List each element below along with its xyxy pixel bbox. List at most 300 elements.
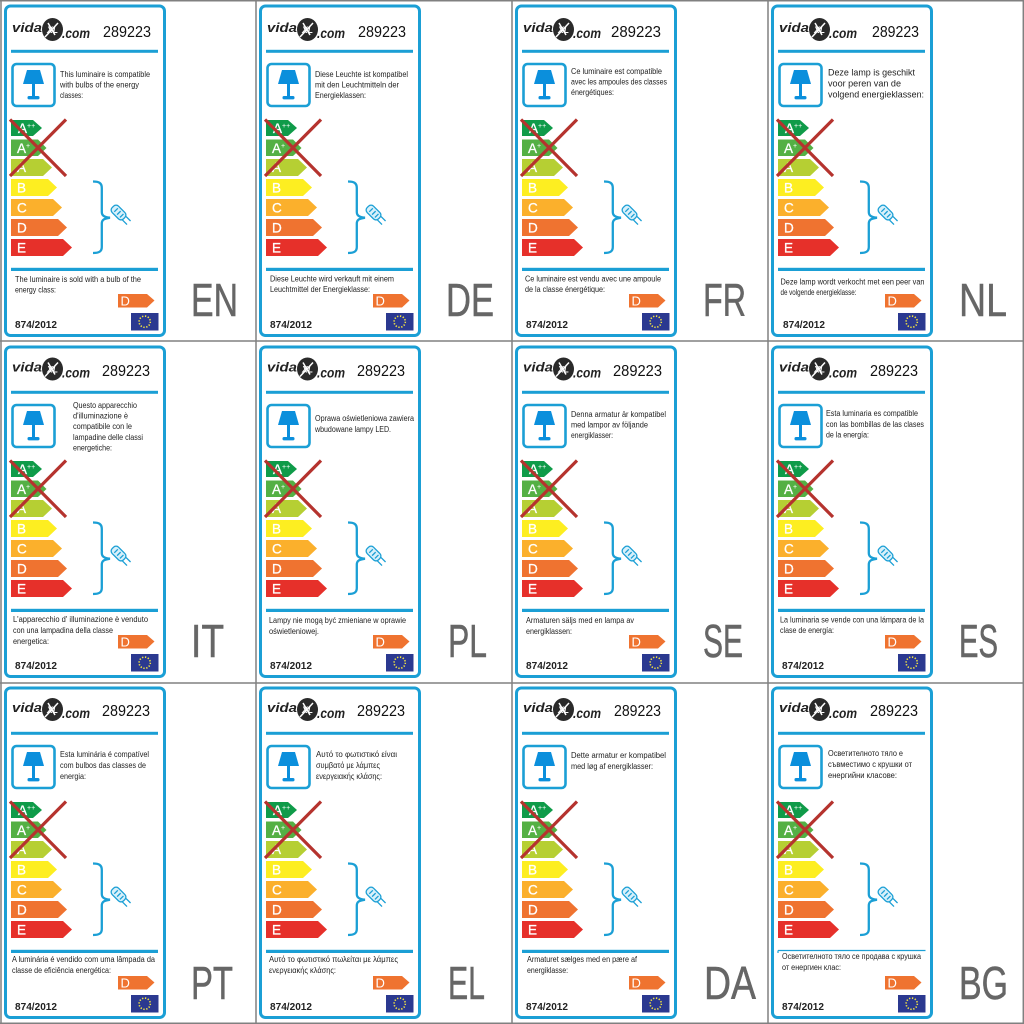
sold-with text: oświetleniowej.: [269, 627, 319, 636]
energy class bars: A: [273, 462, 282, 477]
energy class bars: A: [529, 462, 538, 477]
brace: [604, 182, 621, 253]
sold-with text: con una lampadina della classe: [13, 626, 113, 635]
lower rule: [266, 609, 413, 612]
energy class bars: C: [17, 200, 27, 216]
lower rule: [778, 609, 925, 612]
compatibility text: compatibile con le: [73, 422, 132, 431]
lower rule: [266, 950, 413, 953]
language code: EL: [448, 957, 485, 1009]
red cross: [521, 460, 577, 517]
energy class bars: E: [528, 240, 537, 256]
energy class bars: D: [528, 562, 538, 576]
sold-with text: energiklasse:: [527, 966, 568, 975]
icon: bulb: [877, 545, 899, 567]
compatibility text: com bulbos das classes de: [60, 761, 146, 770]
logo: vida: [267, 20, 297, 35]
energy class bars: B: [528, 522, 537, 536]
energy class bars: C: [272, 882, 282, 898]
compatibility text: [571, 67, 667, 97]
energy class bars: D: [528, 902, 538, 918]
energy class bars: +: [537, 484, 541, 491]
frame: [772, 6, 932, 336]
energy class bars: B: [17, 522, 26, 536]
compatibility text: de la energía:: [826, 430, 869, 440]
sold-with text: [780, 616, 924, 635]
class D arrow: [118, 294, 154, 308]
product number: 289223: [611, 24, 661, 41]
top rule: [266, 732, 413, 735]
sold-with text: [527, 955, 638, 975]
energy class bars: [11, 461, 72, 597]
energy class bars: +: [537, 825, 541, 832]
logo: .com: [317, 705, 345, 721]
compatibility text: d'illuminazione è: [73, 412, 129, 420]
energy class bars: E: [528, 582, 537, 596]
EU flag: [386, 654, 414, 672]
energy class bars: A: [17, 501, 26, 516]
sold-with text: energetica:: [13, 637, 49, 646]
icon: bulb: [365, 886, 387, 908]
energy class bars: A: [18, 462, 27, 477]
energy class bars: ++: [794, 464, 802, 471]
sold-with text: clase de energía:: [780, 626, 834, 635]
energy class bars: E: [528, 922, 537, 938]
EU flag: [386, 313, 414, 330]
class D arrow: D: [120, 294, 130, 308]
regulation number: 874/2012: [526, 320, 568, 331]
logo: XL: [46, 705, 58, 715]
brace: [604, 864, 621, 935]
logo: XL: [301, 25, 313, 35]
energy class bars: E: [17, 922, 26, 938]
energy class bars: D: [272, 902, 282, 918]
logo: XL: [301, 364, 313, 374]
energy class bars: A: [529, 121, 538, 136]
icon: lamp: [12, 746, 54, 788]
panel: EL label: [260, 688, 485, 1018]
compatibility text: This luminaire is compatible: [60, 70, 151, 79]
energy class bars: D: [17, 562, 27, 576]
energy class bars: A: [528, 823, 537, 838]
top rule: [778, 50, 925, 53]
frame: [772, 347, 932, 676]
EU flag: [386, 995, 414, 1012]
compatibility text: Dette armatur er kompatibel: [571, 751, 666, 760]
logo: [12, 698, 90, 721]
icon: lamp: [524, 64, 566, 106]
energy class bars: E: [272, 582, 281, 596]
logo: .com: [317, 364, 345, 380]
compatibility text: Questo apparecchio: [73, 401, 137, 410]
brace: [93, 864, 110, 935]
top rule: [11, 50, 158, 53]
lower rule: [522, 268, 669, 271]
energy class bars: C: [528, 882, 538, 898]
top rule: [522, 732, 669, 735]
red cross: [10, 120, 66, 176]
class D arrow: D: [888, 976, 897, 990]
energy class bars: A: [785, 121, 794, 136]
red cross: [521, 802, 577, 858]
energy class bars: +: [793, 484, 797, 491]
energy class bars: D: [272, 562, 282, 576]
compatibility text: with bulbs of the energy: [59, 80, 139, 90]
frame: [6, 688, 164, 1018]
regulation number: 874/2012: [782, 661, 824, 672]
energy class bars: D: [17, 902, 27, 918]
language code: BG: [959, 957, 1008, 1009]
sold-with text: Ce luminaire est vendu avec une ampoule: [525, 274, 662, 284]
energy class bars: +: [793, 143, 797, 150]
red cross: [10, 802, 66, 858]
language code: DE: [446, 274, 494, 326]
logo: [267, 18, 345, 41]
product number: 289223: [102, 363, 150, 380]
brace: [93, 182, 110, 253]
compatibility text: [828, 749, 912, 780]
language code: PL: [448, 615, 487, 667]
sold-with text: Deze lamp wordt verkocht met een peer van: [780, 278, 924, 286]
frame: [260, 6, 420, 336]
energy class bars: A: [784, 482, 793, 497]
energy class bars: ++: [27, 123, 35, 130]
energy class bars: B: [528, 180, 537, 196]
class D arrow: [885, 976, 922, 990]
top rule: [522, 391, 669, 394]
energy class bars: A: [17, 141, 26, 156]
energy class bars: E: [17, 240, 26, 256]
energy class bars: C: [17, 882, 27, 898]
energy class bars: A: [272, 501, 281, 516]
compatibility text: energiklasser:: [571, 431, 613, 440]
red cross: [777, 460, 833, 517]
logo: .com: [62, 25, 90, 41]
energy class bars: +: [281, 825, 285, 832]
logo: XL: [813, 25, 825, 35]
sold-with text: A luminária é vendido com uma lâmpada da: [12, 955, 155, 964]
logo: vida: [12, 20, 42, 35]
energy class bars: A: [18, 803, 27, 818]
energy class bars: ++: [282, 805, 290, 812]
icon: bulb: [110, 545, 132, 567]
red cross: [777, 120, 833, 176]
sold-with text: [270, 274, 394, 294]
sold-with text: de volgende energieklasse:: [780, 288, 856, 297]
logo: vida: [267, 360, 297, 374]
class D arrow: D: [120, 634, 130, 650]
logo: [267, 358, 345, 380]
icon: bulb: [365, 545, 387, 567]
panel: DA label: [516, 688, 756, 1018]
logo: [779, 698, 857, 721]
energy class bars: A: [528, 141, 537, 156]
icon: bulb: [365, 204, 387, 226]
logo: XL: [813, 364, 825, 374]
logo: vida: [779, 700, 809, 715]
sold-with text: Armaturen säljs med en lampa av: [526, 616, 634, 625]
energy class bars: B: [272, 522, 281, 536]
logo: .com: [573, 364, 601, 380]
sold-with text: [15, 275, 142, 294]
logo: vida: [523, 20, 553, 35]
compatibility text: energia:: [60, 772, 86, 781]
energy class bars: C: [784, 882, 794, 898]
icon: bulb: [621, 886, 643, 908]
frame: [516, 347, 676, 676]
EU flag: [131, 313, 158, 330]
energy class bars: A: [528, 842, 537, 857]
compatibility text: énergétiques:: [571, 88, 614, 97]
compatibility text: Ce luminaire est compatible: [571, 67, 663, 76]
logo: .com: [829, 705, 857, 721]
language code: ES: [959, 615, 998, 667]
EU flag: [131, 654, 158, 672]
brace: [860, 864, 877, 935]
energy class bars: [11, 120, 72, 256]
logo: .com: [829, 25, 857, 41]
panel: PT label: [6, 688, 233, 1018]
energy class bars: B: [784, 862, 793, 878]
energy class bars: ++: [538, 805, 546, 812]
compatibility text: Esta luminária é compatível: [60, 750, 149, 759]
compatibility text: voor peren van de: [828, 78, 901, 88]
energy class bars: C: [272, 200, 282, 216]
energy class bars: A: [272, 823, 281, 838]
language code: FR: [703, 274, 746, 326]
energy class bars: A: [784, 842, 793, 857]
class D arrow: [629, 634, 666, 650]
red cross: [777, 802, 833, 858]
energy class bars: E: [17, 582, 26, 596]
logo: vida: [12, 360, 42, 374]
brace: [348, 182, 365, 253]
compatibility text: avec les ampoules des classes: [571, 78, 667, 86]
logo: XL: [557, 705, 569, 715]
sold-with text: ενεργειακής κλάσης:: [269, 966, 336, 975]
compatibility text: [315, 70, 408, 100]
top rule: [522, 50, 669, 53]
icon: lamp: [268, 64, 310, 106]
class D arrow: D: [632, 976, 641, 990]
class D arrow: [629, 294, 666, 308]
class D arrow: [885, 634, 922, 650]
language code: NL: [959, 274, 1007, 326]
sold-with text: energy class:: [15, 286, 56, 294]
class D arrow: D: [888, 294, 897, 308]
logo: vida: [523, 700, 553, 715]
icon: lamp: [268, 746, 310, 788]
energy class bars: A: [273, 121, 282, 136]
compatibility text: [60, 750, 149, 781]
frame: [516, 688, 676, 1018]
energy class bars: A: [529, 803, 538, 818]
panel: ES label: [772, 347, 998, 676]
logo: XL: [46, 364, 58, 374]
energy class bars: A: [17, 160, 26, 175]
icon: bulb: [621, 204, 643, 226]
compatibility text: lampadine delle classi: [73, 433, 143, 442]
top rule: [266, 50, 413, 53]
energy class bars: [522, 461, 583, 597]
logo: [12, 358, 90, 380]
logo: .com: [829, 364, 857, 380]
energy class bars: [778, 802, 839, 938]
energy class bars: A: [784, 160, 793, 175]
energy class bars: E: [784, 240, 793, 256]
class D arrow: D: [376, 294, 385, 308]
panel: SE label: [516, 347, 743, 676]
sold-with text: [782, 952, 921, 972]
compatibility text: съвместимо с крушки от: [828, 760, 912, 769]
product number: 289223: [613, 363, 662, 380]
top rule: [11, 732, 158, 735]
logo: .com: [62, 364, 90, 380]
frame: [6, 347, 164, 676]
energy class bars: D: [528, 220, 538, 236]
energy class bars: B: [272, 862, 281, 878]
compatibility text: енергийни класове:: [828, 771, 897, 780]
product number: 289223: [870, 363, 918, 380]
compatibility text: Denna armatur är kompatibel: [571, 410, 666, 419]
icon: lamp: [524, 405, 566, 447]
sold-with text: [269, 616, 406, 636]
logo: .com: [573, 25, 601, 41]
logo: .com: [62, 705, 90, 721]
energy class bars: A: [528, 160, 537, 175]
sold-with text: de la classe énergétique:: [525, 285, 605, 294]
compatibility text: συμβατό με λάμπες: [316, 761, 380, 770]
icon: lamp: [12, 64, 54, 106]
sold-with text: от енергиен клас:: [782, 963, 841, 972]
icon: lamp: [780, 405, 822, 447]
energy class bars: B: [528, 862, 537, 878]
EU flag: [131, 995, 158, 1012]
compatibility text: [828, 66, 924, 100]
product number: 289223: [357, 363, 405, 380]
language code: IT: [191, 615, 224, 667]
product number: 289223: [103, 24, 151, 41]
red cross: [265, 802, 321, 858]
sold-with text: Armaturet sælges med en pære af: [527, 955, 638, 964]
panel: DE label: [260, 6, 494, 336]
icon: lamp: [12, 405, 54, 447]
energy class bars: D: [784, 562, 794, 576]
panel: BG label: [772, 688, 1008, 1018]
regulation number: 874/2012: [270, 661, 312, 672]
class D arrow: D: [376, 976, 385, 990]
product number: 289223: [357, 703, 405, 720]
sold-with text: classe de eficiência energética:: [12, 966, 111, 975]
energy class bars: A: [785, 803, 794, 818]
sold-with text: [780, 278, 924, 297]
energy class bars: A: [528, 482, 537, 497]
class D arrow: [118, 976, 154, 990]
energy class bars: +: [26, 484, 30, 491]
energy class bars: ++: [794, 123, 802, 130]
panel: PL label: [260, 347, 487, 676]
logo: [779, 358, 857, 380]
compatibility text: [571, 751, 666, 771]
energy class bars: E: [272, 240, 281, 256]
energy class bars: ++: [282, 123, 290, 130]
icon: bulb: [621, 545, 643, 567]
icon: lamp: [524, 746, 566, 788]
regulation number: 874/2012: [782, 1002, 824, 1013]
panel: FR label: [516, 6, 746, 336]
compatibility text: Осветителното тяло е: [828, 749, 904, 758]
compatibility text: [826, 409, 924, 440]
red cross: [265, 460, 321, 517]
energy class bars: ++: [27, 805, 35, 812]
energy class bars: A: [272, 482, 281, 497]
sold-with text: Осветителното тяло се продава с крушка: [782, 952, 921, 961]
sold-with text: energiklassen:: [526, 627, 572, 636]
top rule: [778, 732, 925, 735]
energy class bars: A: [17, 842, 26, 857]
product number: 289223: [872, 24, 919, 41]
energy class bars: B: [17, 180, 26, 196]
energy class bars: [778, 120, 839, 256]
frame: [772, 688, 932, 1018]
top rule: [11, 391, 158, 394]
sold-with text: [525, 274, 662, 294]
energy class bars: +: [537, 143, 541, 150]
logo: [267, 698, 345, 721]
icon: bulb: [110, 886, 132, 908]
EU flag: [898, 654, 926, 672]
energy class bars: A: [272, 160, 281, 175]
sold-with text: L'apparecchio d' illuminazione è venduto: [13, 615, 149, 624]
compatibility text: ενεργειακής κλάσης:: [316, 772, 382, 781]
language code: EN: [191, 274, 238, 326]
lower rule: [11, 268, 158, 271]
energy class bars: B: [17, 862, 26, 878]
compatibility text: mit den Leuchtmitteln der: [315, 80, 399, 90]
panel: EN label: [6, 6, 238, 336]
compatibility text: Esta luminaria es compatible: [826, 409, 918, 418]
icon: lamp: [268, 405, 310, 447]
icon: bulb: [877, 204, 899, 226]
compatibility text: energetiche:: [73, 444, 112, 452]
sold-with text: Leuchtmittel der Energieklasse:: [270, 285, 370, 294]
icon: bulb: [110, 204, 132, 226]
energy class bars: [522, 802, 583, 938]
brace: [348, 522, 365, 594]
top rule: [266, 391, 413, 394]
frame: [260, 688, 420, 1018]
brace: [860, 522, 877, 594]
energy class bars: A: [785, 462, 794, 477]
class D arrow: [629, 976, 666, 990]
compatibility text: wbudowane lampy LED.: [314, 425, 391, 434]
energy class bars: A: [784, 501, 793, 516]
sold-with text: Lampy nie mogą być zmieniane w oprawie: [269, 616, 406, 625]
sold-with text: Diese Leuchte wird verkauft mit einem: [270, 274, 394, 284]
energy class bars: A: [272, 842, 281, 857]
icon: lamp: [780, 64, 822, 106]
class D arrow: D: [376, 634, 385, 650]
class D arrow: [118, 634, 154, 650]
regulation number: 874/2012: [526, 1002, 568, 1013]
class D arrow: [373, 976, 410, 990]
product number: 289223: [870, 703, 918, 720]
EU flag: [642, 995, 670, 1012]
sold-with text: [526, 616, 634, 636]
energy class bars: C: [17, 542, 27, 556]
product number: 289223: [358, 24, 406, 41]
class D arrow: D: [632, 634, 641, 650]
